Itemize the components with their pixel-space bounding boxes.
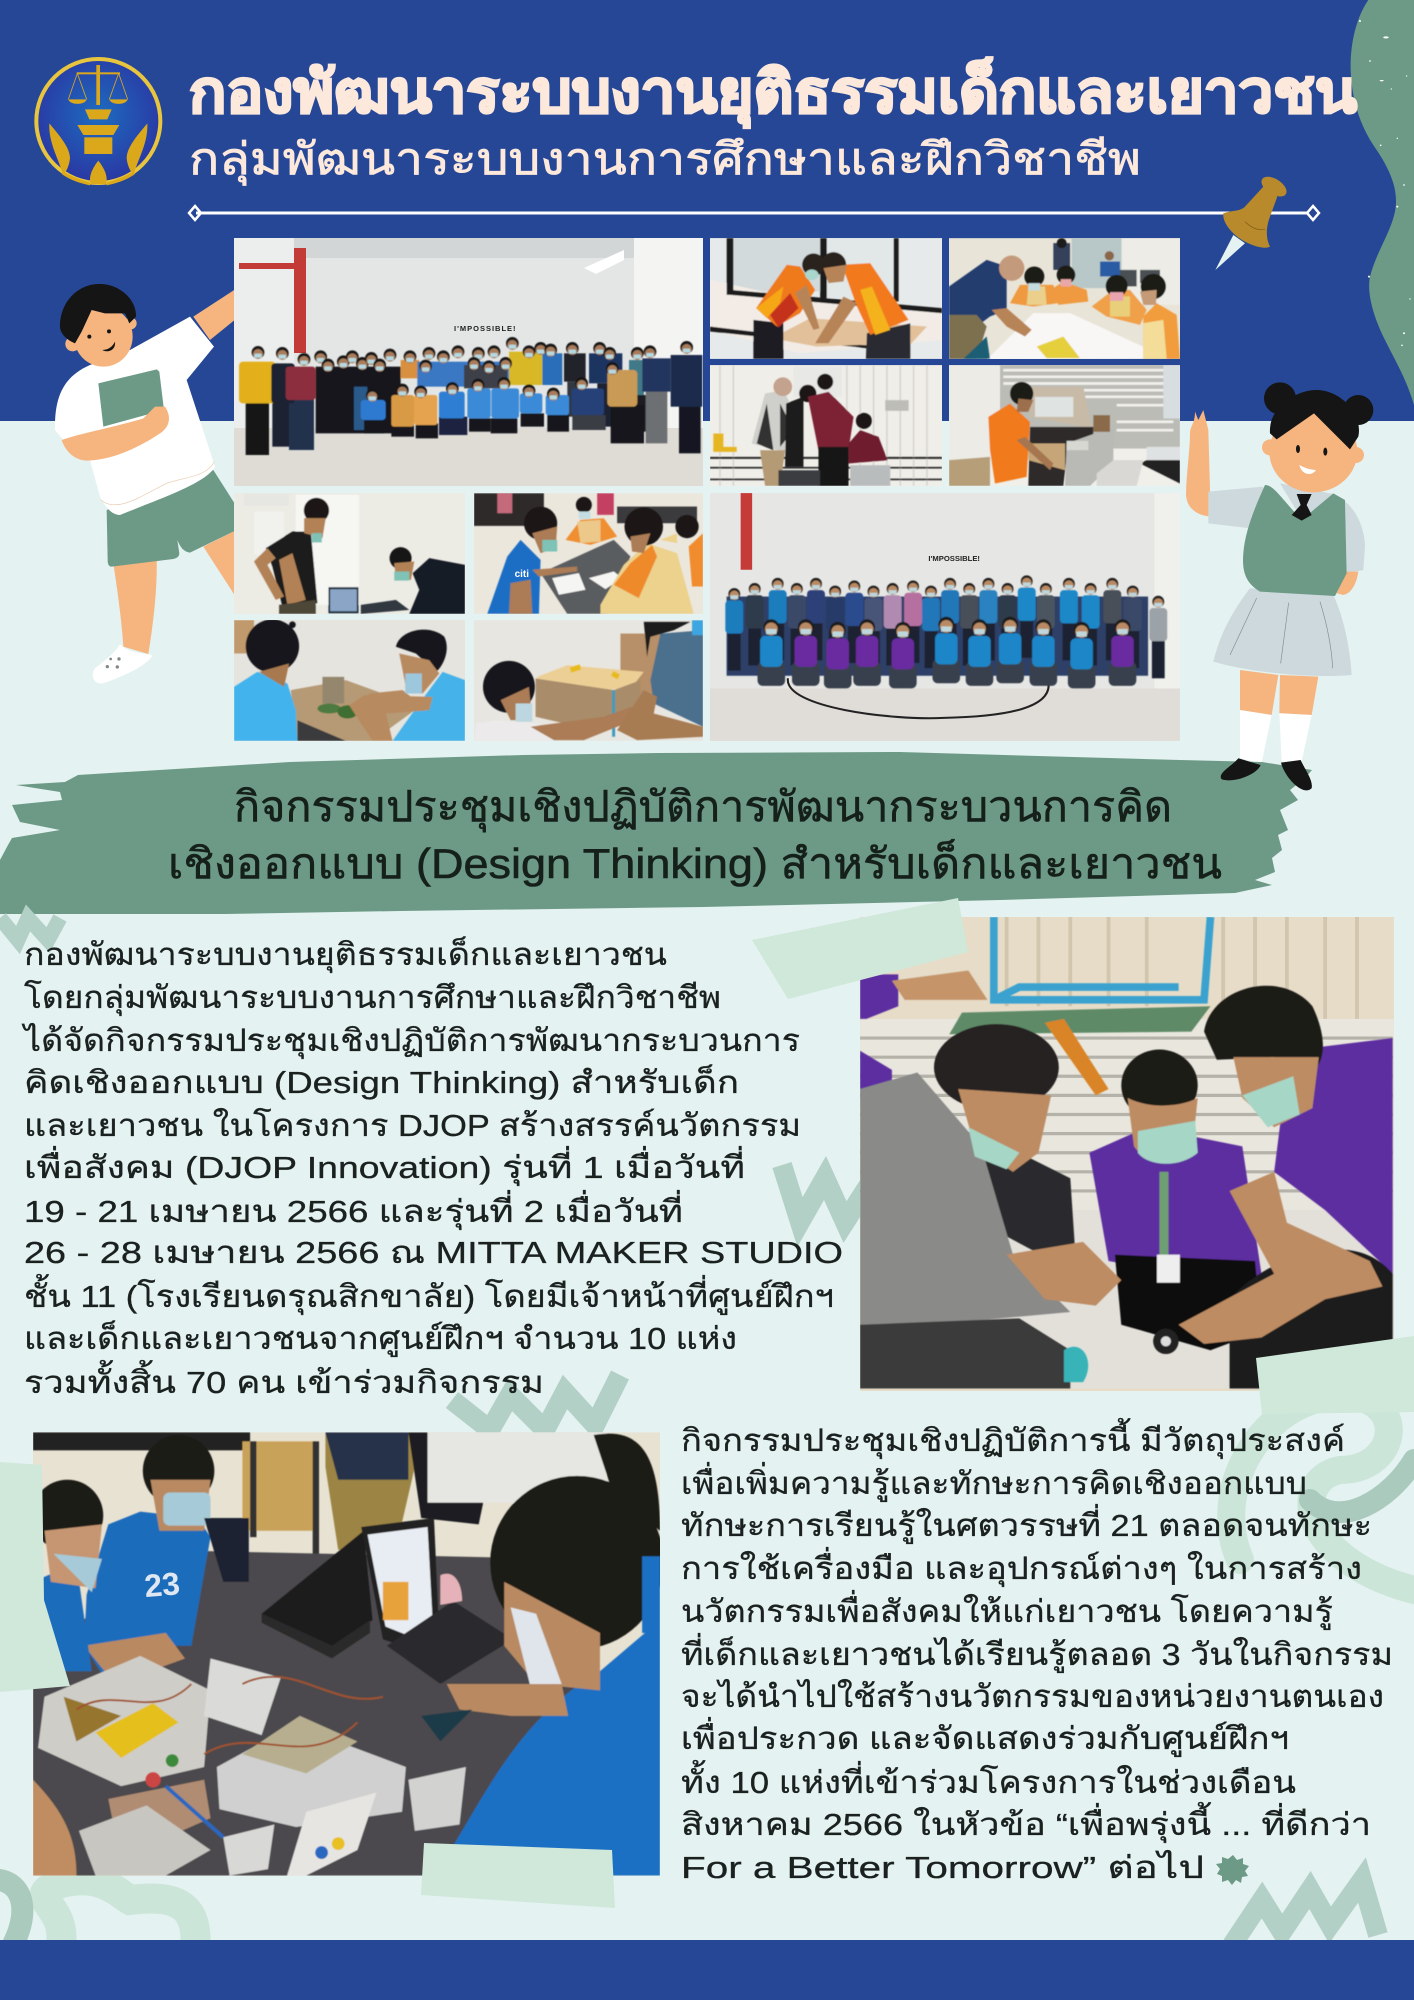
- left man: [860, 1072, 1070, 1331]
- right boy: [434, 1620, 660, 1876]
- header title: กองพัฒนาระบบงานยุติธรรมเด็กและเยาวชน: [189, 57, 1357, 129]
- girl shoes over banner: [1221, 758, 1312, 790]
- divider line with diamonds: [189, 206, 1319, 220]
- photo: student at laser cutter: [949, 365, 1180, 486]
- paragraph 1: และเด็กและเยาวชนจากศูนย์ฝึกฯ จำนวน 10 แห่ง: [24, 1320, 737, 1357]
- header subtitle: กลุ่มพัฒนาระบบงานการศึกษาและฝึกวิชาชีพ: [189, 135, 1141, 186]
- photo: group photo 1: [234, 238, 703, 486]
- green brush banner: [0, 752, 1312, 914]
- photo: group photo 2: I'MPOSSIBLE!: [928, 554, 980, 563]
- decorative tape 2: [1256, 1336, 1414, 1414]
- paragraph 1: ได้จัดกิจกรรมประชุมเชิงปฏิบัติการพัฒนากระบวนการ: [21, 1023, 800, 1060]
- icon: green burst: [1216, 1855, 1249, 1885]
- boy in blue 23: [84, 1512, 211, 1684]
- photo: student with cardboard box: [474, 620, 703, 741]
- paragraph 2: [681, 1418, 1393, 1885]
- paragraph 2: นวัตกรรมเพื่อสังคมให้แก่เยาวชน โดยความรู้: [681, 1590, 1333, 1630]
- paragraph 2: ที่เด็กและเยาวชนได้เรียนรู้ตลอด 3 วันในกิจกรรม: [681, 1633, 1393, 1673]
- header band: [0, 0, 1414, 421]
- paragraph 1: และเยาวชน ในโครงการ DJOP สร้างสรรค์นวัตกรรม: [24, 1108, 801, 1143]
- logo emblem: [36, 59, 160, 185]
- paragraph 1: [21, 936, 843, 1400]
- photo: students with laptops and electronics: [33, 1432, 660, 1876]
- laptops: [262, 1531, 373, 1646]
- paragraph 1: โดยกลุ่มพัฒนาระบบงานการศึกษาและฝึกวิชาชีพ: [24, 980, 721, 1017]
- illustration: boy holding book: [55, 284, 237, 683]
- banner title: [168, 783, 1222, 887]
- paragraph 2: ทั้ง 10 แห่งที่เข้าร่วมโครงการในช่วงเดือน: [681, 1760, 1296, 1800]
- parts boxes: [38, 1656, 211, 1786]
- paragraph 1: ชั้น 11 (โรงเรียนดรุณสิกขาลัย) โดยมีเจ้าหน้าที่ศูนย์ฝึกฯ: [24, 1274, 834, 1316]
- paragraph 1: คิดเชิงออกแบบ (Design Thinking) สำหรับเด็ก: [24, 1064, 739, 1100]
- banner title: เชิงออกแบบ (Design Thinking) สำหรับเด็กและเยาวชน: [168, 839, 1222, 887]
- decorative swirls: [0, 1395, 1414, 1950]
- paragraph 1: รวมทั้งสิ้น 70 คน เข้าร่วมกิจกรรม: [24, 1360, 544, 1400]
- icon: push pin: [1215, 173, 1290, 270]
- paragraph 2: ทักษะการเรียนรู้ในศตวรรษที่ 21 ตลอดจนทักษะ: [681, 1504, 1372, 1544]
- photo: group photo 1: I'MPOSSIBLE!: [454, 324, 517, 333]
- paragraph 1: กองพัฒนาระบบงานยุติธรรมเด็กและเยาวชน: [24, 936, 667, 974]
- paragraph 2: การใช้เครื่องมือ และอุปกรณ์ต่างๆ ในการสร้าง: [681, 1547, 1362, 1588]
- wave decoration top right: [1351, 0, 1414, 405]
- boy far left: [33, 1563, 92, 1671]
- illustration: girl in uniform: [1186, 382, 1373, 763]
- photo: students with laptops and electronics: 23: [143, 1565, 181, 1604]
- paragraph 2: เพื่อประกวด และจัดแสดงร่วมกับศูนย์ฝึกฯ: [681, 1717, 1289, 1757]
- photo: group photo 2: [710, 493, 1180, 741]
- decorative tape 3: [0, 1462, 70, 1692]
- decorative zigzags: [0, 918, 1378, 1945]
- center boy: [1089, 1127, 1261, 1287]
- photo: students with laptop at whiteboard: [234, 493, 465, 614]
- footer band: [0, 1940, 1414, 2000]
- photo: boys assembling robot car: [860, 917, 1394, 1391]
- paragraph 1: เพื่อสังคม (DJOP Innovation) รุ่นที่ 1 เมื่อวันที่: [24, 1146, 745, 1187]
- photo: students around table, citi shirt: [474, 493, 703, 614]
- paragraph 2: เพื่อเพิ่มความรู้และทักษะการคิดเชิงออกแบบ: [681, 1462, 1307, 1502]
- photo: students around table, citi shirt: citi: [515, 569, 529, 580]
- paragraph 2: For a Better Tomorrow” ต่อไป: [681, 1850, 1204, 1885]
- right man: [1274, 1038, 1393, 1274]
- photo: students at table with papers: [949, 238, 1180, 359]
- paragraph 1: 26 - 28 เมษายน 2566 ณ MITTA MAKER STUDIO: [24, 1235, 843, 1270]
- decorative tape 4: [421, 1843, 615, 1908]
- photo: two students orange shirts: [710, 238, 942, 359]
- photo: men at a table by curtain: [710, 365, 942, 486]
- photo: students with miniature model: [234, 620, 465, 741]
- paragraph 2: กิจกรรมประชุมเชิงปฏิบัติการนี้ มีวัตถุประสงค์: [681, 1418, 1345, 1460]
- paragraph 2: สิงหาคม 2566 ในหัวข้อ “เพื่อพรุ่งนี้ ... ที่ดีกว่า: [681, 1802, 1371, 1844]
- paragraph 1: 19 - 21 เมษายน 2566 และรุ่นที่ 2 เมื่อวันที่: [24, 1190, 683, 1231]
- decorative tape 1: [752, 898, 968, 999]
- paragraph 2: จะได้นำไปใช้สร้างนวัตกรรมของหน่วยงานตนเอง: [681, 1679, 1384, 1714]
- banner title: กิจกรรมประชุมเชิงปฏิบัติการพัฒนากระบวนการคิด: [234, 783, 1172, 833]
